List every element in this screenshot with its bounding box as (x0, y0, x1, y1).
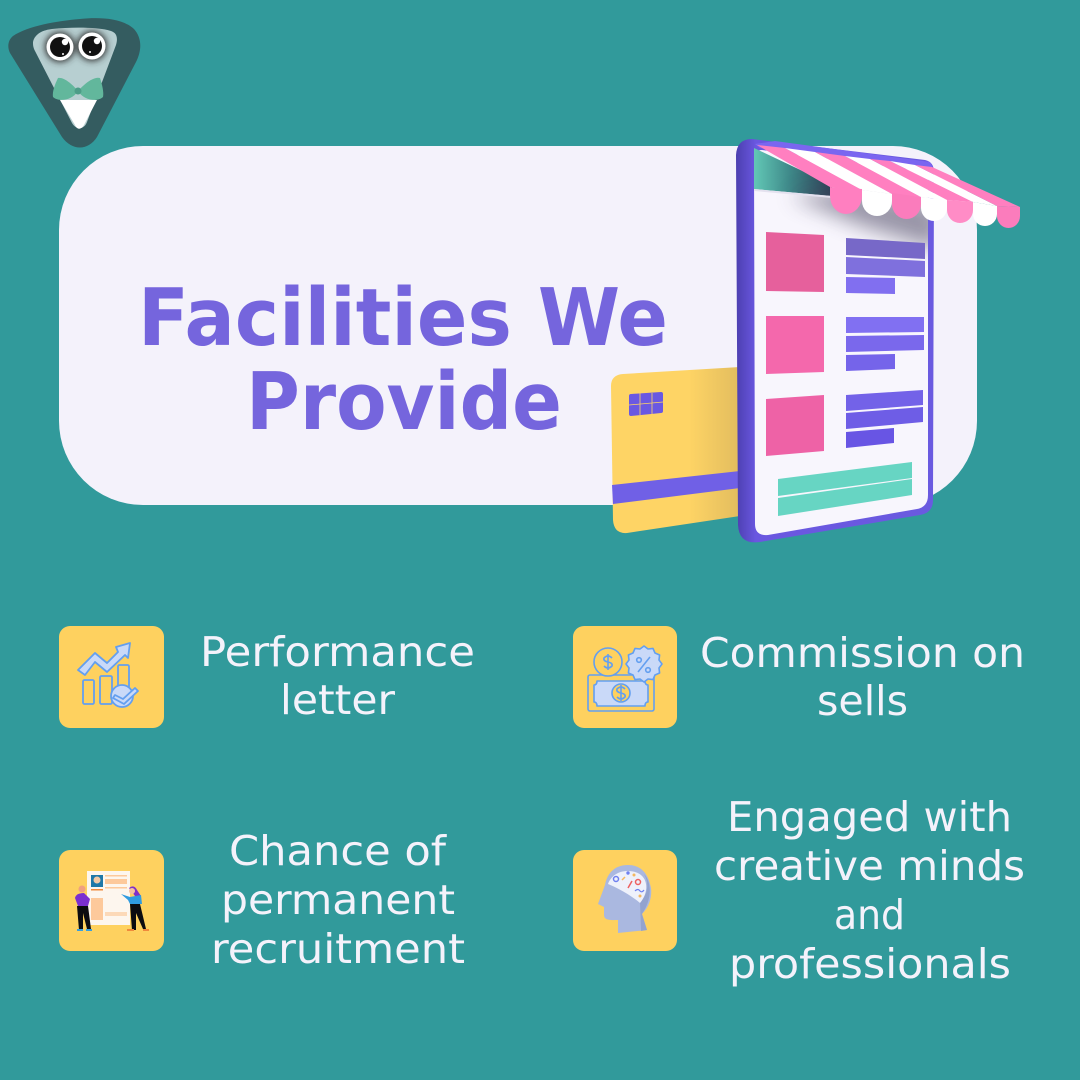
icon tile: money and discount (573, 626, 677, 728)
purple text bars (846, 238, 925, 448)
phone body (736, 139, 934, 542)
person left (75, 886, 92, 931)
illustration: credit card (611, 367, 740, 533)
pink squares (766, 232, 824, 456)
logo: bow-tie mascot (8, 18, 140, 147)
item: permanent recruitment (59, 827, 465, 973)
shirt (60, 100, 97, 129)
resume sheet (87, 871, 130, 925)
item: performance letter (59, 626, 475, 728)
label: and (834, 891, 905, 939)
phone screen (754, 150, 928, 535)
person right (121, 886, 149, 931)
label (700, 629, 1025, 725)
illustration: phone storefront (736, 139, 1020, 542)
awning shadow (754, 189, 940, 250)
icon tile: resume with two people (59, 850, 164, 951)
label (211, 827, 465, 973)
right eye (78, 32, 106, 60)
icon tile: head with ideas (573, 850, 677, 951)
item: creative minds (573, 793, 1025, 988)
label: Engaged with (727, 793, 1012, 841)
bow tie (53, 78, 103, 100)
awning (755, 141, 1020, 228)
label: letter (280, 676, 395, 724)
icon tile: growth chart (59, 626, 164, 728)
panel: title card (59, 146, 977, 505)
label: Chance of (229, 827, 448, 875)
label (714, 793, 1025, 988)
label: professionals (729, 940, 1011, 988)
title (138, 272, 668, 448)
item: commission on sells (573, 626, 1025, 728)
screen top green (754, 148, 832, 196)
label: Performance (200, 628, 475, 676)
label: creative minds (714, 842, 1025, 890)
card chip (629, 392, 663, 416)
title: Facilities We (138, 272, 668, 364)
title: Provide (246, 356, 562, 448)
awning scallops (830, 187, 1020, 228)
label: permanent (221, 876, 455, 924)
label: sells (817, 677, 908, 725)
green buttons (778, 462, 912, 516)
label: recruitment (211, 925, 465, 973)
label: Commission on (700, 629, 1025, 677)
label (200, 628, 475, 724)
left eye (46, 34, 74, 60)
